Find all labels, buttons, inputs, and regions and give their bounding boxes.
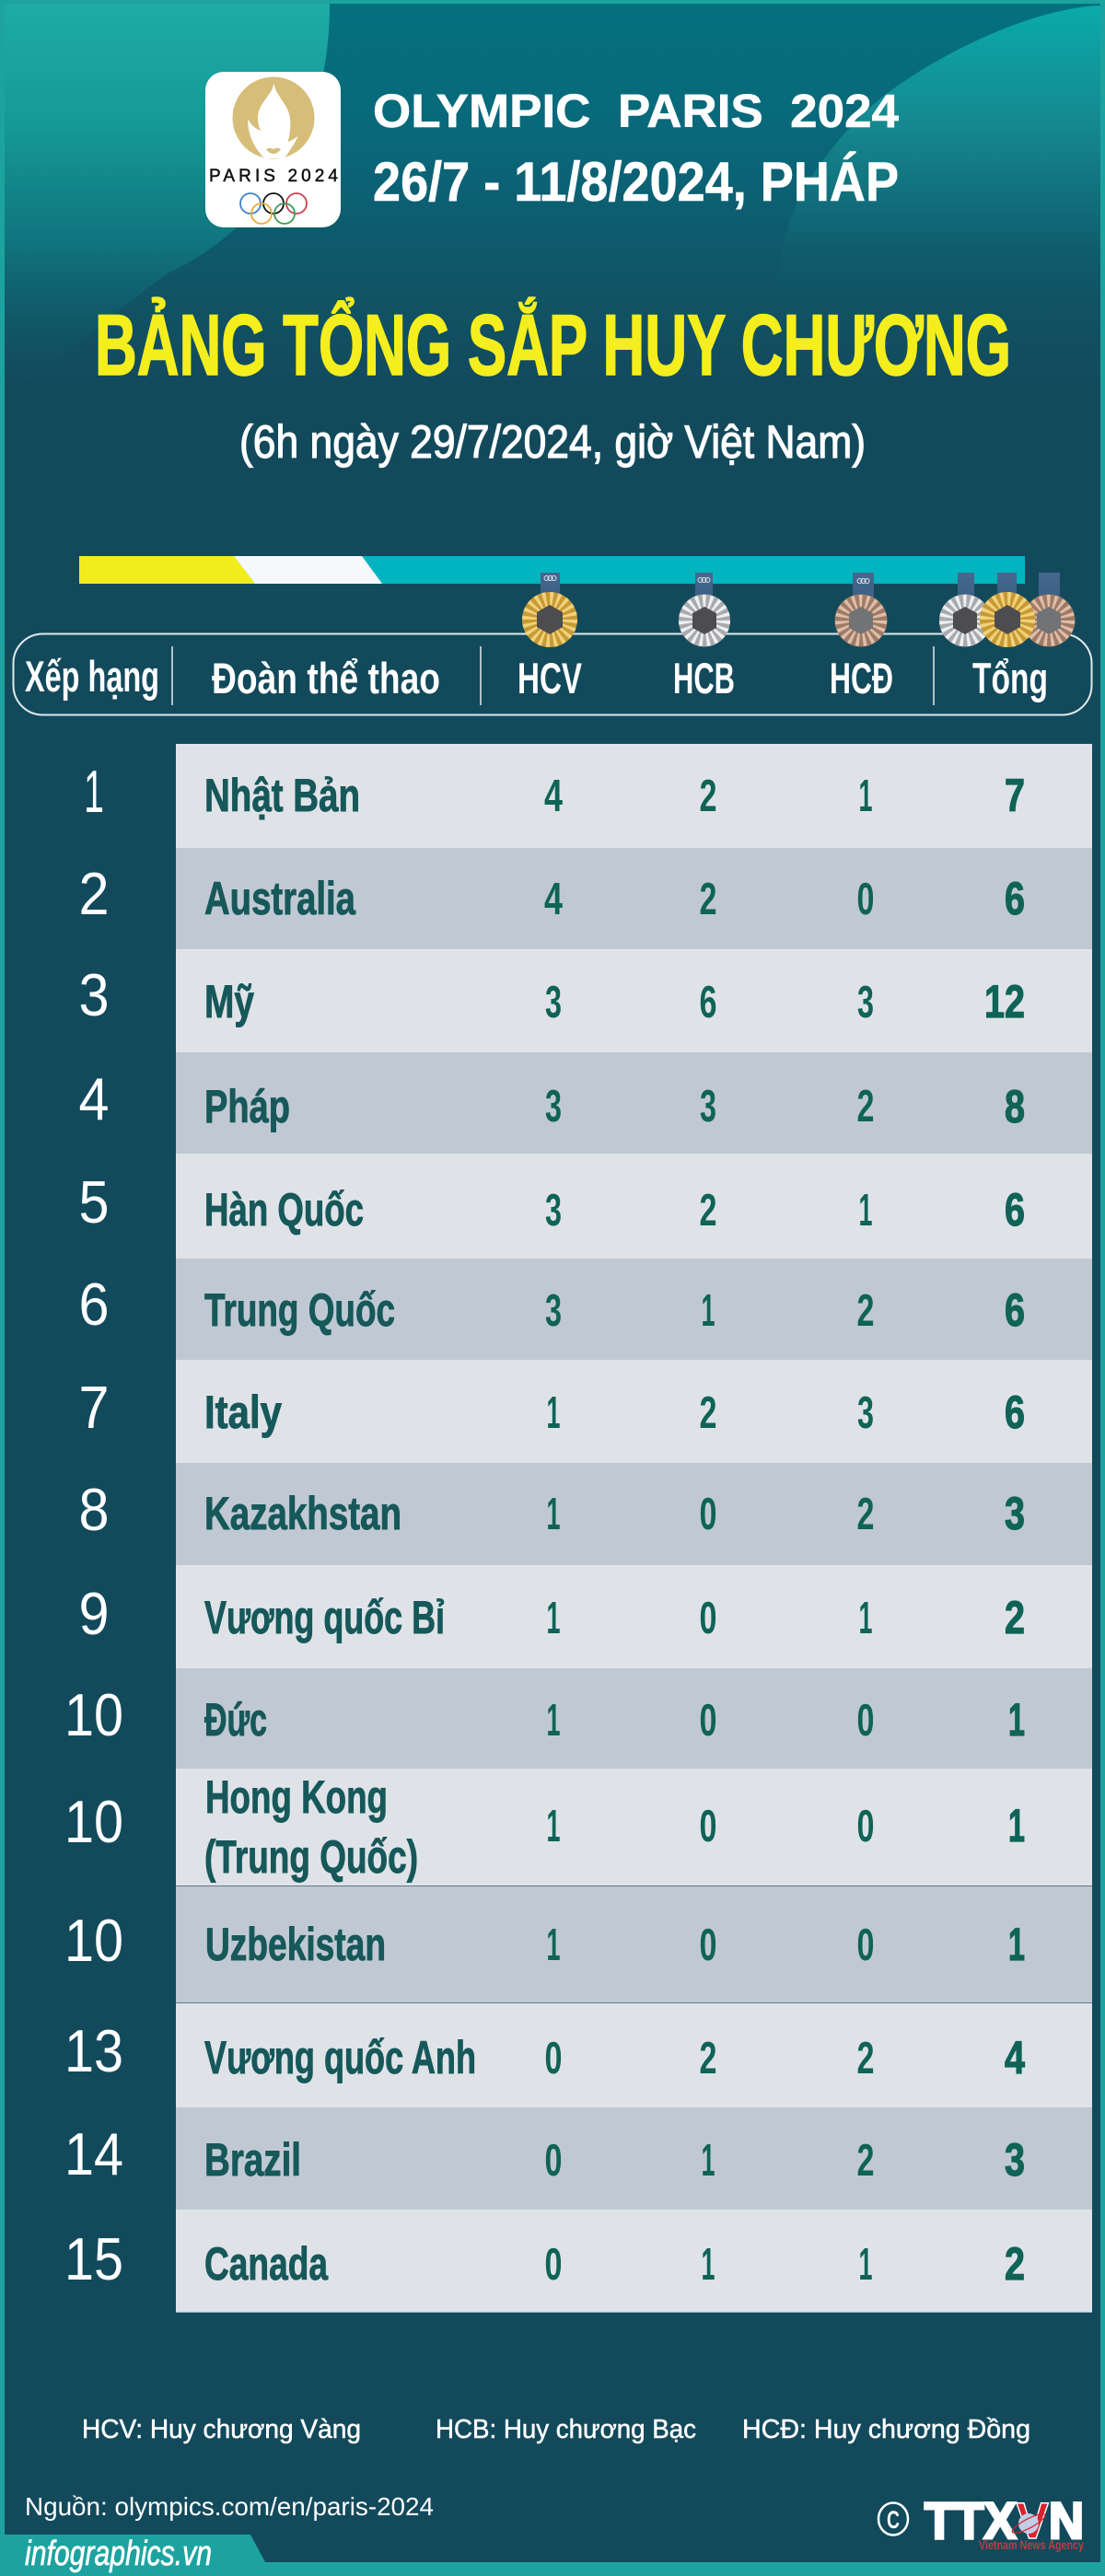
row 4: Pháp [204, 1081, 290, 1132]
row 4: 3 [545, 1082, 562, 1131]
row 10: 1 [547, 1696, 560, 1746]
row 8: 3 [1005, 1488, 1025, 1539]
row 9: 1 [547, 1594, 560, 1643]
row 5: 2 [700, 1186, 716, 1236]
legend [82, 2415, 1030, 2444]
row 12: 1 [547, 1920, 560, 1970]
row 1: 2 [700, 772, 716, 821]
row 5: 3 [545, 1186, 562, 1236]
row 3: 3 [79, 961, 109, 1028]
header: bronze: HCĐ [830, 654, 893, 702]
row 1: 1 [858, 772, 873, 821]
row 13: 4 [1005, 2032, 1025, 2083]
row 13: 13 [64, 2017, 123, 2084]
row 14: 3 [1005, 2134, 1025, 2186]
row 15: 2 [1005, 2238, 1025, 2290]
row 6 [79, 1259, 1092, 1360]
footer tab: infographics.vn [0, 2535, 1105, 2576]
row 7: 3 [857, 1388, 874, 1438]
row 9: 0 [700, 1594, 716, 1643]
row 8: 0 [700, 1490, 716, 1539]
row 6: 1 [702, 1286, 715, 1336]
row 8: 1 [547, 1490, 560, 1539]
row 14: 1 [702, 2136, 715, 2186]
row 1: 1 [84, 758, 104, 825]
row 14: Brazil [204, 2134, 301, 2186]
row 10: Đức [204, 1694, 267, 1746]
legend: gold: HCV: Huy chương Vàng [82, 2415, 361, 2444]
row 8: 2 [856, 1490, 875, 1539]
row 8: Kazakhstan [204, 1488, 401, 1539]
medal: gold [522, 573, 577, 647]
row 7: 2 [700, 1388, 716, 1438]
copyright symbol: C [887, 2506, 900, 2534]
row 14 [64, 2107, 1092, 2210]
row 12: Uzbekistan [205, 1919, 386, 1970]
row 5: Hàn Quốc [204, 1184, 364, 1236]
row 12 [64, 1886, 1092, 2003]
row 3: Mỹ [204, 976, 254, 1027]
row 3: 3 [857, 978, 874, 1027]
row 12: 1 [1008, 1919, 1025, 1970]
source: Nguồn: olympics.com/en/paris-2024 [25, 2492, 434, 2521]
row 13: 2 [700, 2034, 716, 2083]
row 15: 0 [545, 2240, 562, 2290]
row 10: 1 [1008, 1694, 1025, 1746]
row 2 [79, 848, 1092, 949]
row 2: 6 [1005, 873, 1025, 924]
row 9: 2 [1005, 1592, 1025, 1643]
row 12: 0 [856, 1920, 875, 1970]
header: silver: HCB [673, 654, 735, 702]
row 2: Australia [204, 873, 356, 924]
row 3: 6 [700, 978, 716, 1027]
row 6: 3 [545, 1286, 562, 1336]
row 13: 0 [545, 2034, 562, 2083]
row 14: 14 [64, 2120, 123, 2187]
row 15 [64, 2210, 1092, 2313]
header: gold: HCV [518, 654, 582, 702]
row 4 [79, 1052, 1092, 1154]
row 9: 9 [79, 1580, 109, 1647]
row 1: 7 [1005, 770, 1025, 821]
row 7: 7 [79, 1374, 109, 1441]
row 14: 0 [545, 2136, 562, 2186]
row 15: 1 [858, 2240, 873, 2290]
row 10: 10 [64, 1681, 123, 1748]
tri-colour bar [79, 556, 1025, 584]
icon: globe [1010, 2511, 1047, 2536]
logo wordmark: PARIS 2024 [209, 167, 338, 186]
legend: silver: HCB: Huy chương Bạc [436, 2415, 696, 2444]
row 2: 2 [79, 860, 109, 927]
row 11 [64, 1769, 1092, 1886]
row 9: 1 [858, 1594, 873, 1643]
table header [13, 633, 1092, 714]
icon: flame and face emblem [232, 77, 315, 158]
row 12: 10 [64, 1907, 123, 1974]
legend: bronze: HCĐ: Huy chương Đồng [742, 2415, 1030, 2444]
row 10: 0 [856, 1696, 875, 1746]
row 3 [79, 949, 1092, 1052]
row 6: Trung Quốc [204, 1284, 395, 1336]
row 7: 1 [547, 1388, 560, 1438]
row 8: 8 [79, 1476, 109, 1543]
row 12: 0 [700, 1920, 716, 1970]
row 13 [64, 2003, 1092, 2107]
icon: olympic rings [240, 193, 307, 224]
row 11: 1 [1008, 1800, 1025, 1851]
row 7: Italy [204, 1387, 282, 1438]
row 11: Hong Kong [205, 1771, 388, 1823]
footer tab: infographics.vn: infographics.vn [25, 2535, 212, 2573]
row 1: 4 [544, 772, 563, 821]
row 5: 5 [79, 1168, 109, 1236]
row 5: 6 [1005, 1184, 1025, 1236]
row 4: 2 [856, 1082, 875, 1131]
row 13: 2 [856, 2034, 875, 2083]
row 15: 1 [702, 2240, 715, 2290]
row 4: 3 [700, 1082, 716, 1131]
event dates and host: 26/7 - 11/8/2024, PHÁP [373, 151, 899, 213]
header: total: Tổng [972, 654, 1048, 702]
logo: Paris 2024 [205, 72, 341, 227]
row 10 [64, 1668, 1092, 1769]
agency wordmark: TTXVN [925, 2491, 1084, 2549]
row 7: 6 [1005, 1387, 1025, 1438]
subtitle: (6h ngày 29/7/2024, giờ Việt Nam) [239, 416, 866, 468]
medal: bronze [834, 573, 888, 646]
medal: silver [679, 573, 730, 646]
row 5: 1 [858, 1186, 873, 1236]
row 7 [79, 1360, 1092, 1463]
row 11: 10 [64, 1788, 123, 1855]
row 3: 12 [984, 976, 1025, 1027]
row 6: 6 [1005, 1284, 1025, 1336]
row 2: 2 [700, 875, 716, 924]
row 4: 4 [79, 1065, 109, 1132]
row 11: 1 [547, 1802, 560, 1851]
copyright symbol [878, 2502, 908, 2535]
row 8 [79, 1463, 1092, 1565]
row 6: 2 [856, 1286, 875, 1336]
row 4: 8 [1005, 1081, 1025, 1132]
row 9 [79, 1565, 1092, 1668]
logo: TTXVN [878, 2491, 1084, 2552]
row 9: Vương quốc Bỉ [204, 1592, 445, 1643]
row 13: Vương quốc Anh [204, 2032, 476, 2083]
table: medal standings [64, 744, 1092, 2313]
row 1: Nhật Bản [204, 770, 360, 821]
row 6: 6 [79, 1271, 109, 1338]
row 10: 0 [700, 1696, 716, 1746]
row 2: 0 [856, 875, 875, 924]
row 15: 15 [64, 2225, 123, 2292]
event name: OLYMPIC PARIS 2024 [373, 85, 900, 137]
row 2: 4 [544, 875, 563, 924]
header: delegation: Đoàn thể thao [212, 654, 440, 702]
row 14: 2 [856, 2136, 875, 2186]
row 11: (Trung Quốc) [204, 1831, 418, 1883]
row 11: 0 [700, 1802, 716, 1851]
medals: total group [939, 573, 1076, 647]
row 3: 3 [545, 978, 562, 1027]
row 5 [79, 1154, 1092, 1259]
row 15: Canada [204, 2238, 329, 2290]
header: rank: Xếp hạng [25, 652, 159, 701]
row 11: 0 [856, 1802, 875, 1851]
row 1 [84, 744, 1092, 848]
